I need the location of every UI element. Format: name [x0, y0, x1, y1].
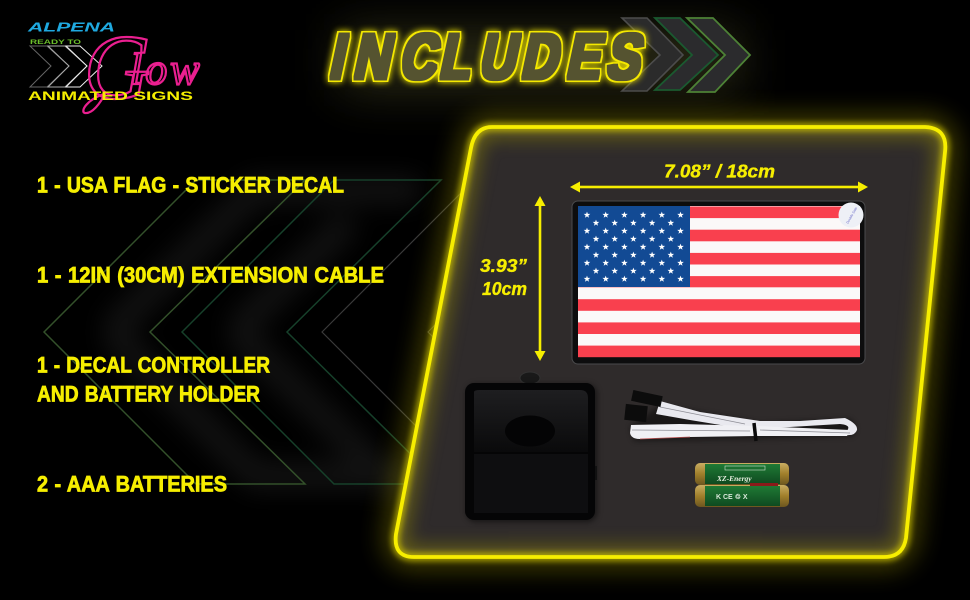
- height dimension label: [480, 256, 527, 299]
- sticker: Double Side: [846, 206, 858, 225]
- controller and battery holder: [465, 372, 597, 522]
- brand name: ALPENA: [26, 20, 115, 34]
- height dimension label: 3.93”: [480, 256, 527, 276]
- item: flag decal: 1 - USA FLAG - STICKER DECAL: [37, 172, 344, 198]
- background chevrons: [44, 180, 580, 490]
- script word: low: [130, 45, 203, 94]
- script word: G: [84, 16, 150, 118]
- script word: [83, 16, 203, 118]
- logo chevrons: [30, 46, 102, 87]
- height arrow: [534, 196, 546, 361]
- title: INCLUDES: [325, 21, 650, 93]
- decal backing: [572, 201, 865, 364]
- stars: [584, 212, 684, 282]
- item: batteries: 2 - AAA BATTERIES: [37, 472, 227, 496]
- AAA batteries: XZ-Energy: [716, 474, 752, 483]
- item: extension cable: 1 - 12IN (30CM) EXTENSION CABLE: [37, 262, 384, 288]
- height dimension label: 10cm: [482, 279, 527, 299]
- title glow backdrop: [340, 30, 740, 90]
- logo: [26, 16, 203, 118]
- stripes: [578, 206, 860, 357]
- title chevrons: [622, 18, 750, 92]
- extension cable: [624, 390, 857, 441]
- connectors: [631, 390, 663, 407]
- subtitle: ANIMATED SIGNS: [28, 89, 193, 103]
- list of included items: [37, 172, 384, 496]
- width arrow: [570, 182, 868, 192]
- tagline: READY TO: [30, 39, 81, 46]
- ribbon lower: [630, 424, 850, 439]
- ribbon upper: [656, 401, 857, 435]
- item: controller line two: AND BATTERY HOLDER: [37, 382, 260, 406]
- item: controller line one: 1 - DECAL CONTROLLER: [37, 352, 270, 378]
- sticker: [838, 202, 864, 228]
- canton: [578, 206, 690, 287]
- AAA batteries: K CE ♲ X: [716, 493, 748, 501]
- USA flag decal: [572, 201, 865, 364]
- width dimension label: 7.08” / 18cm: [664, 162, 775, 182]
- AAA batteries: [695, 463, 789, 507]
- panel: product photo frame: [396, 127, 945, 557]
